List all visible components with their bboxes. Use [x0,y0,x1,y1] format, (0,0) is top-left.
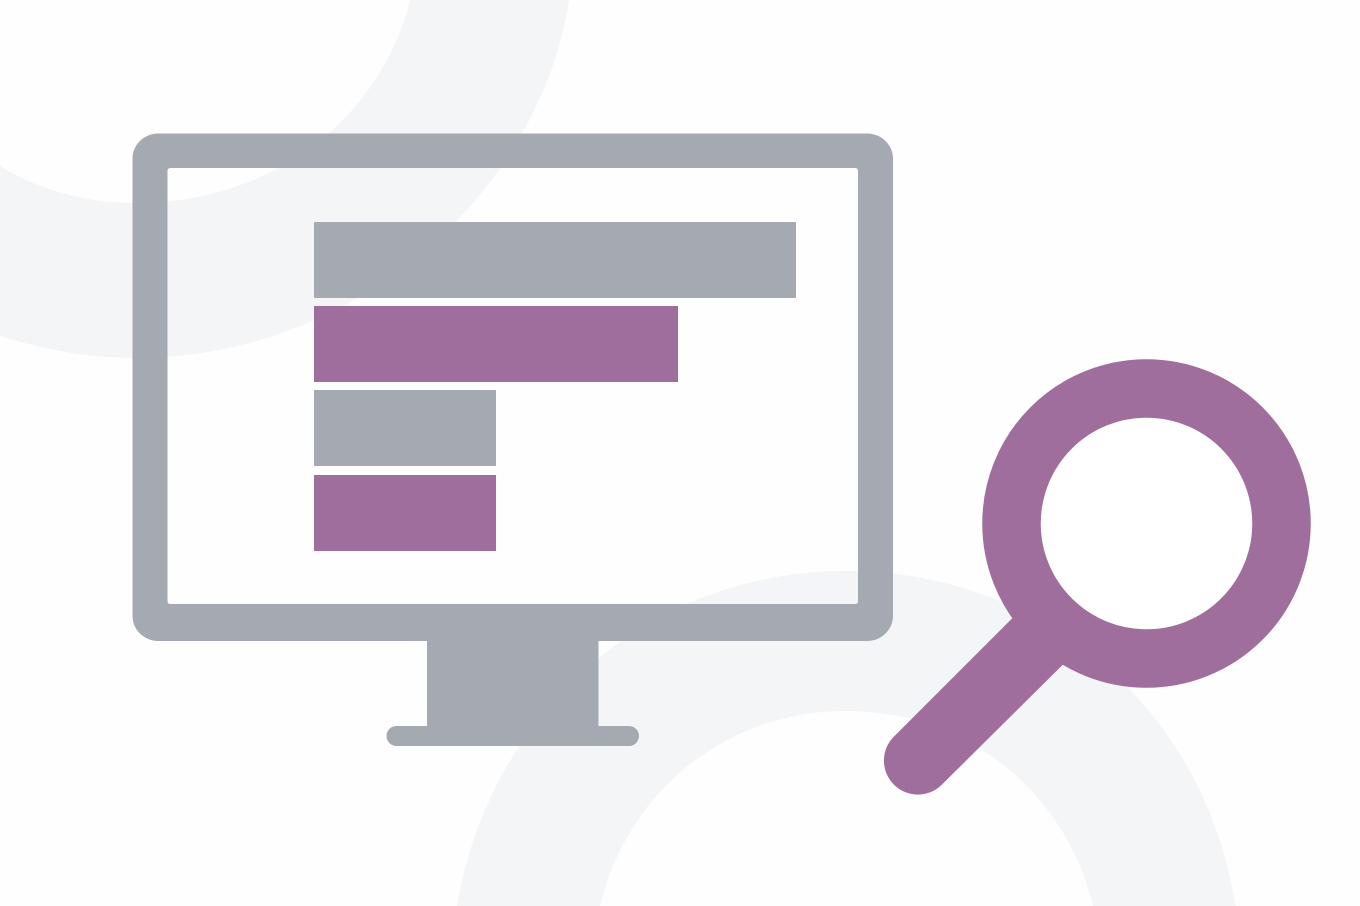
background arc: bottom right [457,571,1236,906]
icon: magnifying glass [884,388,1282,795]
monitor frame [132,134,893,641]
background arc: top left [0,0,569,358]
bar 2 [314,306,678,382]
bar chart [314,222,796,551]
magnifier handle [884,618,1063,795]
bar 3 [314,390,496,466]
magnifier lens [1012,388,1282,658]
monitor stand [386,640,639,746]
icon: computer monitor [132,134,893,746]
bar 4 [314,475,496,551]
bar 1 [314,222,796,298]
